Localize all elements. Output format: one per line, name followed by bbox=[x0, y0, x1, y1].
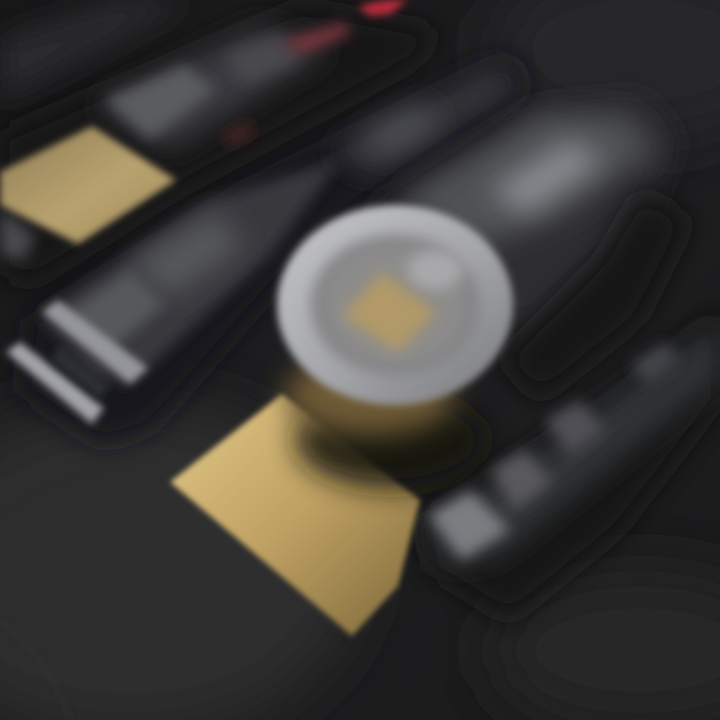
gold plate: upper left bbox=[0, 126, 176, 244]
white highlight strips bbox=[6, 300, 148, 424]
card: right strip behind ring bbox=[370, 100, 690, 400]
card: top-left dark strip bbox=[0, 0, 440, 285]
ring inner bbox=[311, 235, 479, 375]
ring shadow bbox=[295, 392, 485, 488]
card: lower-right strip bbox=[420, 310, 720, 620]
ring base edge bbox=[285, 355, 455, 435]
ring inner highlight bbox=[407, 250, 463, 290]
gold centre bbox=[342, 272, 436, 352]
background streak: lower-left curve bbox=[0, 620, 70, 720]
card: middle long strip bbox=[6, 55, 530, 445]
coin: ring with gold centre bbox=[277, 205, 513, 488]
gold plate: lower centre bbox=[170, 394, 420, 636]
ring outer bbox=[277, 205, 513, 405]
red accents bbox=[222, 0, 408, 146]
